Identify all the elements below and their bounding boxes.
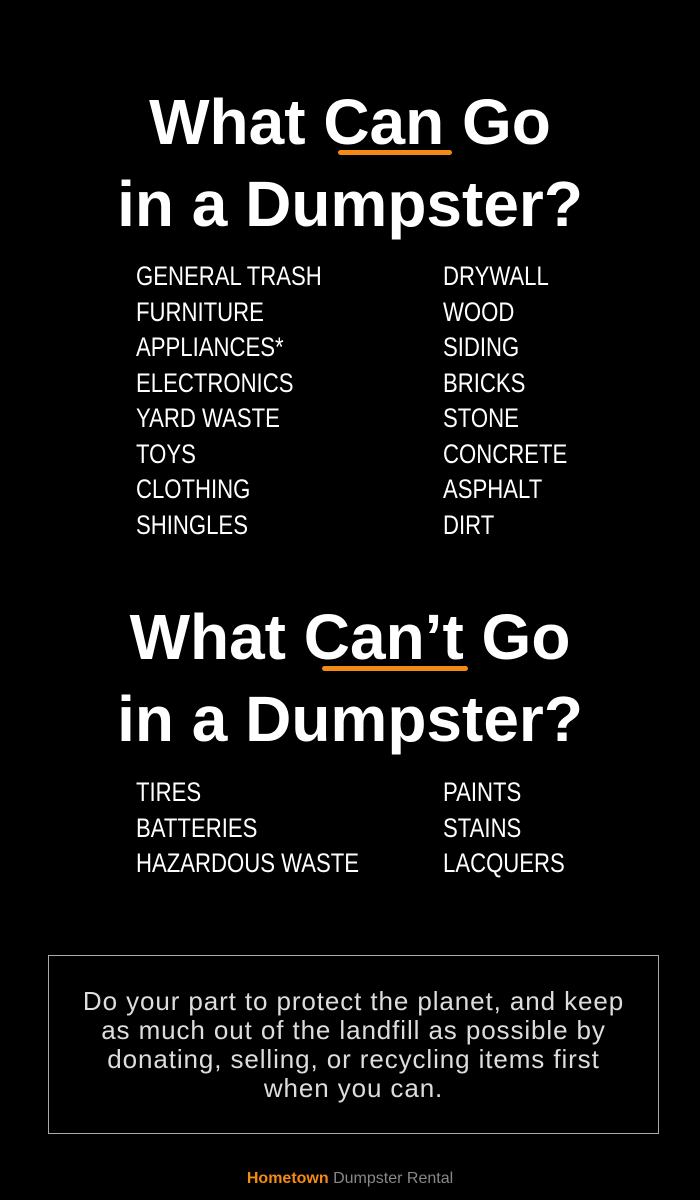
list: allowed left: TOYS	[136, 438, 196, 468]
list: prohibited right: LACQUERS	[443, 848, 565, 878]
list: prohibited left: HAZARDOUS WASTE	[136, 848, 359, 878]
title: what can't go: in a Dumpster?	[117, 683, 583, 755]
list: allowed left: YARD WASTE	[136, 403, 280, 433]
list: allowed left: CLOTHING	[136, 474, 250, 504]
list: prohibited right: PAINTS	[443, 777, 521, 807]
list: allowed right: SIDING	[443, 332, 519, 362]
list: allowed left	[136, 261, 322, 540]
list: allowed left: SHINGLES	[136, 510, 248, 540]
list: prohibited left: TIRES	[136, 777, 201, 807]
title: what can go: What Can Go	[149, 86, 551, 158]
list: allowed right: STONE	[443, 403, 519, 433]
list: allowed right: DIRT	[443, 510, 494, 540]
list: allowed left: ELECTRONICS	[136, 368, 293, 398]
title: what can't go: What Can’t Go	[130, 601, 570, 673]
callout box: when you can.	[264, 1072, 443, 1102]
callout box	[48, 955, 659, 1134]
list: allowed left: FURNITURE	[136, 296, 264, 326]
list: allowed right: BRICKS	[443, 368, 525, 398]
callout box: donating, selling, or recycling items first	[107, 1044, 600, 1074]
underline: can	[338, 150, 452, 155]
list: allowed left: GENERAL TRASH	[136, 261, 322, 291]
list: allowed right: DRYWALL	[443, 261, 549, 291]
list: allowed left: APPLIANCES*	[136, 332, 284, 362]
list: allowed right	[443, 261, 567, 540]
title: what can go: in a Dumpster?	[117, 168, 583, 240]
footer logo: Hometown Dumpster Rental	[247, 1170, 453, 1187]
title: what can't go	[117, 601, 583, 755]
title: what can go	[117, 86, 583, 240]
list: prohibited right: STAINS	[443, 812, 521, 842]
list: allowed right: CONCRETE	[443, 438, 567, 468]
callout box: as much out of the landfill as possible by	[101, 1014, 606, 1044]
underline: can't	[322, 666, 468, 671]
list: allowed right: WOOD	[443, 296, 514, 326]
list: prohibited left	[136, 777, 359, 878]
callout box: Do your part to protect the planet, and keep	[83, 986, 624, 1016]
list: prohibited right	[443, 777, 565, 878]
list: prohibited left: BATTERIES	[136, 812, 257, 842]
list: allowed right: ASPHALT	[443, 474, 542, 504]
